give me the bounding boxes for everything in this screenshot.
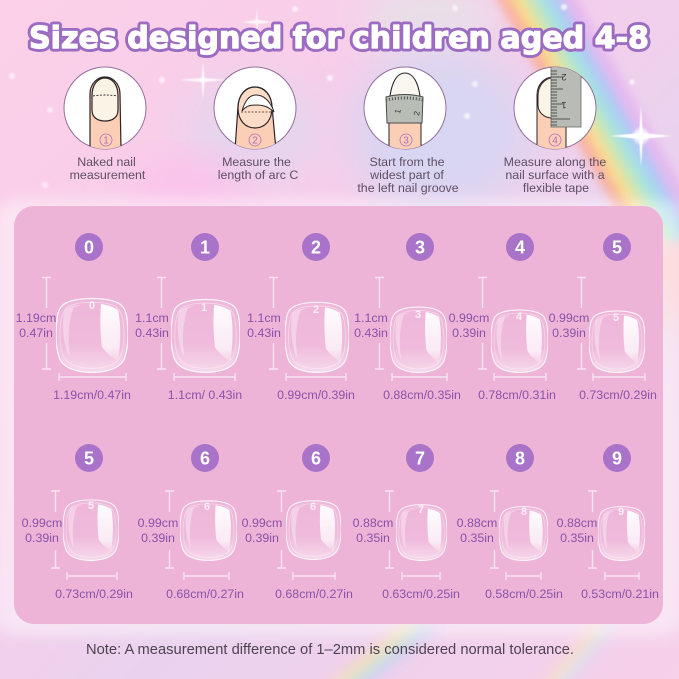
size 5 bottom: 0.99cm (22, 516, 62, 530)
size 7 bottom: 7 (418, 504, 424, 516)
step 4: tape along nail (504, 66, 606, 195)
size 1 top (135, 233, 242, 402)
title: Sizes designed for children aged 4-8 (29, 21, 649, 56)
size 2 top: 0.43in (247, 326, 281, 340)
caption 2: Measure the (222, 155, 291, 169)
size 6 bottom second (242, 444, 353, 601)
size 7 bottom: 0.88cm (353, 516, 393, 530)
title: Sizes designed for children aged 4-8 (29, 21, 649, 56)
size 3 top: 1.1cm (354, 311, 388, 325)
size 3 top: 0.88cm/0.35in (383, 388, 461, 402)
size 2 top (247, 233, 355, 402)
panel: size chart (14, 206, 663, 624)
size 4 top: 4 (516, 311, 523, 323)
size 4 top: 0.99cm (449, 311, 489, 325)
size 2 top: 0.99cm/0.39in (277, 388, 355, 402)
size 4 top: 0.39in (452, 326, 486, 340)
size 6 bottom (138, 444, 244, 601)
size 5 top: 0.39in (552, 326, 586, 340)
icon: arc measurement: 2 (252, 136, 258, 146)
icon: naked nail: 1 (103, 136, 109, 146)
icon: tape on finger: 3 (403, 136, 409, 146)
size 7 bottom: 7 (415, 448, 425, 468)
size 5 bottom: 0.39in (25, 531, 59, 545)
size 6 bottom: 6 (200, 448, 210, 468)
size 5 bottom: 0.73cm/0.29in (55, 587, 133, 601)
caption 2: length of arc C (218, 168, 298, 182)
step 2: measure arc C (214, 67, 298, 182)
icon: ruler on finger: 1 (561, 100, 567, 110)
size 4 top: 0.78cm/0.31in (478, 388, 556, 402)
size 7 bottom: 0.35in (356, 531, 390, 545)
caption 3: Start from the (369, 155, 445, 169)
size 9 bottom: 9 (618, 506, 624, 518)
size 6 bottom: 6 (204, 501, 210, 513)
size 9 bottom: 0.53cm/0.21in (581, 587, 659, 601)
size 0 top: 0 (84, 238, 94, 258)
size 3 top: 3 (415, 309, 421, 321)
size 0 top: 1.19cm/0.47in (53, 388, 131, 402)
size 9 bottom (557, 444, 659, 601)
size 8 bottom (457, 444, 563, 601)
caption 1: measurement (70, 168, 146, 182)
size 6 bottom second: 0.39in (245, 531, 279, 545)
size 5 top: 0.99cm (549, 311, 589, 325)
caption 1: Naked nail (77, 155, 136, 169)
note: Note: A measurement difference of 1–2mm is considered normal tolerance. (86, 642, 574, 658)
size 4 top: 4 (515, 238, 525, 258)
panel background (14, 206, 663, 624)
sparkles (9, 4, 672, 188)
size 8 bottom: 0.35in (460, 531, 494, 545)
caption 4: flexible tape (523, 181, 589, 195)
size 2 top: 2 (313, 304, 319, 316)
size 4 top (449, 233, 556, 402)
size 6 bottom second: 0.68cm/0.27in (275, 587, 353, 601)
size 1 top: 0.43in (135, 326, 169, 340)
size 5 bottom: 5 (84, 448, 94, 468)
caption 3: the left nail groove (357, 181, 459, 195)
size 6 bottom: 0.99cm (138, 516, 178, 530)
size 8 bottom: 0.58cm/0.25in (485, 587, 563, 601)
icon: ruler on finger: 4 (552, 136, 558, 146)
size 6 bottom second: 0.99cm (242, 516, 282, 530)
size 6 bottom second: 6 (311, 448, 321, 468)
step 1: naked nail measurement (64, 67, 146, 182)
size 9 bottom: 9 (612, 448, 622, 468)
icon: tape on finger: 2 (412, 110, 422, 116)
size 0 top (16, 233, 131, 402)
size 7 bottom: 0.63cm/0.25in (382, 587, 460, 601)
size 0 top: 0.47in (19, 326, 53, 340)
size 6 bottom: 0.68cm/0.27in (166, 587, 244, 601)
size 2 top: 1.1cm (247, 311, 281, 325)
size 1 top: 1 (200, 238, 210, 258)
size 8 bottom: 8 (515, 448, 525, 468)
size 6 bottom second: 6 (310, 501, 316, 513)
icon: ruler on finger: 2 (561, 72, 567, 82)
caption 3: widest part of (369, 168, 444, 182)
icon: tape on finger (364, 67, 446, 150)
size 5 bottom: 5 (88, 500, 94, 512)
size 0 top: 1.19cm (16, 311, 56, 325)
caption 4: Measure along the (504, 155, 606, 169)
size 3 top: 3 (415, 238, 425, 258)
size 3 top (354, 233, 461, 402)
size 5 top: 0.73cm/0.29in (579, 388, 657, 402)
size 2 top: 2 (311, 238, 321, 258)
size 1 top: 1.1cm (135, 311, 169, 325)
size 8 bottom: 8 (521, 506, 527, 518)
size 1 top: 1.1cm/ 0.43in (168, 388, 242, 402)
size 0 top: 0 (89, 300, 95, 312)
size 5 top: 5 (612, 238, 622, 258)
size 5 top: 5 (613, 312, 619, 324)
caption 4: nail surface with a (505, 168, 605, 182)
size 5 top (549, 233, 657, 402)
step 3: tape around nail (357, 67, 459, 195)
size 9 bottom: 0.88cm (557, 516, 597, 530)
size 1 top: 1 (201, 302, 207, 314)
size 8 bottom: 0.88cm (457, 516, 497, 530)
size 5 bottom (22, 444, 133, 601)
icon: ruler on finger (514, 66, 596, 150)
icon: tape on finger: 1 (393, 108, 403, 114)
size 7 bottom (353, 444, 460, 601)
size 6 bottom: 0.39in (141, 531, 175, 545)
size 9 bottom: 0.35in (560, 531, 594, 545)
size 3 top: 0.43in (354, 326, 388, 340)
